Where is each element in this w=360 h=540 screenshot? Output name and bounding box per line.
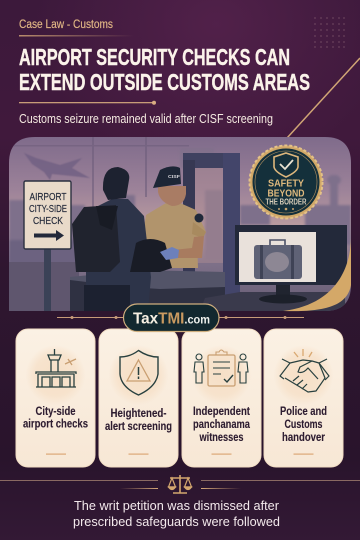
closing statement: prescribed safeguards were followed [73,514,280,529]
footer rules [0,480,360,489]
card: police and customs handover: handover [282,432,325,444]
card: heightened-alert screening: Heightened- [110,408,167,420]
icon: clipboard and two witnesses [194,350,248,386]
x-ray monitor [200,225,347,311]
airport city-side sign: AIRPORT [30,191,67,203]
card: city-side airport checks: City-side [36,406,76,418]
officer [140,166,206,268]
card: police and customs handover: Customs [284,419,322,431]
card: city-side airport checks [16,329,95,467]
metal detector [183,153,240,303]
card: police and customs handover [264,329,343,467]
floor [9,262,79,311]
decorative rule right of logo [219,316,304,319]
eyebrow: Case Law - Customs: Case Law - Customs [19,19,113,31]
counter [70,270,225,311]
shield check icon [274,153,298,177]
icon: airport terminal and tower [36,349,76,387]
gold arc on hero corner [283,238,351,311]
logo pill: TaxTMI.com: TaxTMI.com [133,310,210,328]
closing statement: The writ petition was dismissed after [74,498,280,513]
city skyline [9,161,351,262]
card: independent panchanama witnesses: panchanama [193,419,250,431]
decorative rule left of logo [57,316,123,319]
title [19,44,310,95]
icon: shield with warning [120,350,158,395]
seal: safety beyond the border: SAFETY [268,178,304,190]
card: heightened-alert screening: alert screening [105,421,172,433]
icon: handshake [280,349,329,392]
airport city-side sign [24,181,71,311]
card: independent panchanama witnesses: witnesses [199,432,244,444]
cards [16,329,343,467]
seal: safety beyond the border [250,146,322,218]
officer: CISF [168,174,180,179]
gold diagonal line [287,58,360,138]
icon: scales of justice [168,475,192,493]
card: independent panchanama witnesses [182,329,261,467]
title rule with dot [19,101,156,105]
card: police and customs handover: Police and [280,406,327,418]
airport city-side sign: CHECK [33,215,63,227]
subtitle: Customs seizure remained valid after CISF screening [19,112,273,126]
card: heightened-alert screening [99,329,178,467]
airplane [24,153,90,180]
traveller with backpack [72,167,151,311]
card: city-side airport checks: airport checks [23,418,88,430]
suitcase on screen [254,240,302,279]
card: independent panchanama witnesses: Independent [193,406,250,418]
decorative dot grid [314,17,345,48]
closing statement [73,498,280,529]
window frames [14,137,189,206]
seal: safety beyond the border: BEYOND [268,188,305,200]
logo pill: TaxTMI.com [124,304,219,332]
airport city-side sign: CITY-SIDE [29,203,67,215]
hero illustration [9,137,351,311]
x-ray bag and gloved hand [130,239,179,272]
seal: safety beyond the border: THE BORDER [266,198,307,206]
